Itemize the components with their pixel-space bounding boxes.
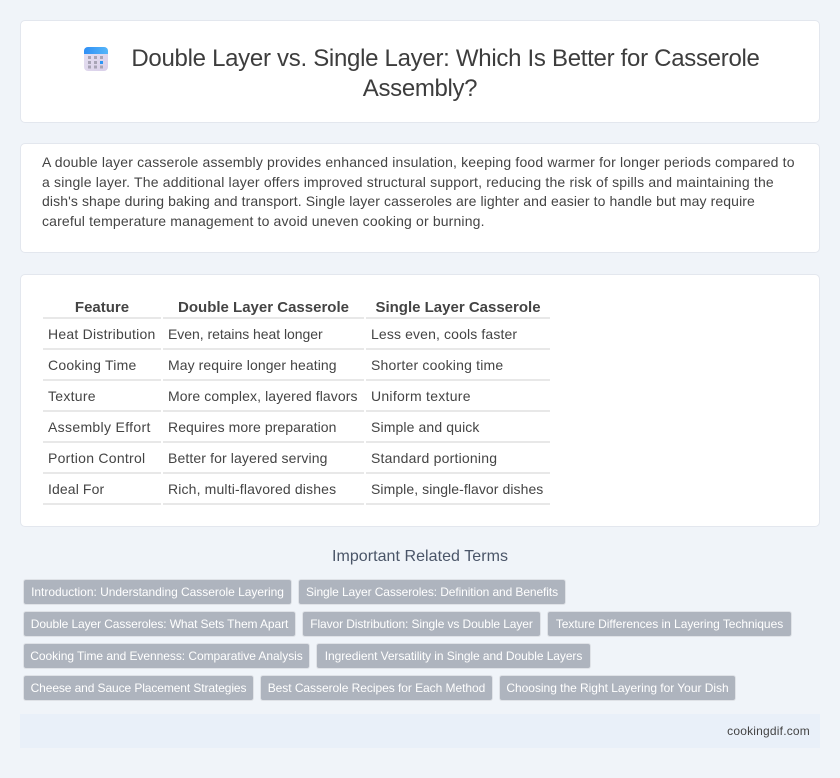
comparison table: More complex, layered flavors — [168, 388, 358, 404]
panel: header — [20, 20, 820, 123]
related term tags: Introduction: Understanding Casserole Layering — [31, 585, 284, 599]
related term tags: Single Layer Casseroles: Definition and Benefits — [306, 585, 558, 599]
comparison table: Standard portioning — [371, 450, 497, 466]
related term tags: Choosing the Right Layering for Your Dish — [506, 681, 729, 695]
comparison table: Assembly Effort — [48, 419, 151, 435]
comparison table: Simple, single-flavor dishes — [371, 481, 543, 497]
intro text: A double layer casserole assembly provides enhanced insulation, keeping food warmer for longer periods compared to — [42, 154, 795, 170]
icon: calendar — [84, 47, 108, 71]
related term tags — [23, 579, 792, 701]
comparison table: Rich, multi-flavored dishes — [168, 481, 336, 497]
comparison table: Less even, cools faster — [371, 326, 517, 342]
comparison table: Ideal For — [48, 481, 104, 497]
panel: introduction — [20, 143, 820, 253]
related term tags: Cooking Time and Evenness: Comparative Analysis — [30, 649, 303, 663]
related term tags: Best Casserole Recipes for Each Method — [268, 681, 485, 695]
comparison table: Texture — [48, 388, 96, 404]
comparison table: Heat Distribution — [48, 326, 156, 342]
table header row: Double Layer Casserole — [178, 299, 349, 316]
title: Double Layer vs. Single Layer: Which Is Better for Casserole — [131, 45, 760, 72]
related term tags: Flavor Distribution: Single vs Double Layer — [310, 617, 533, 631]
comparison table: Portion Control — [48, 450, 145, 466]
intro text: careful temperature management to avoid uneven cooking or burning. — [42, 213, 485, 229]
related term tags: Cheese and Sauce Placement Strategies — [31, 681, 246, 695]
intro text — [42, 154, 795, 229]
comparison table: Simple and quick — [371, 419, 480, 435]
related term tags: Texture Differences in Layering Techniques — [556, 617, 783, 631]
footer bar — [20, 714, 820, 748]
comparison table: Cooking Time — [48, 357, 137, 373]
comparison table — [43, 299, 550, 505]
related term tags: Double Layer Casseroles: What Sets Them Apart — [31, 617, 288, 631]
table header row — [75, 299, 541, 316]
title — [131, 45, 760, 102]
heading: related terms: Important Related Terms — [332, 548, 508, 565]
comparison table: Even, retains heat longer — [168, 326, 323, 342]
table header row: Single Layer Casserole — [375, 299, 541, 316]
comparison table: Shorter cooking time — [371, 357, 503, 373]
title: Assembly? — [363, 75, 477, 102]
related term tags: Ingredient Versatility in Single and Double Layers — [325, 649, 582, 663]
comparison table: Uniform texture — [371, 388, 471, 404]
panel: comparison table — [20, 274, 820, 527]
footer source: cookingdif.com — [727, 724, 810, 738]
comparison table: Requires more preparation — [168, 419, 337, 435]
comparison table: May require longer heating — [168, 357, 337, 373]
intro text: dish's shape during baking and transport. Single layer casseroles are lighter and easier to handle but may require — [42, 193, 755, 209]
table header row: Feature — [75, 299, 129, 316]
intro text: a single layer. The additional layer offers improved structural support, reducing the risk of spills and maintaining the — [42, 174, 774, 190]
comparison table: Better for layered serving — [168, 450, 328, 466]
